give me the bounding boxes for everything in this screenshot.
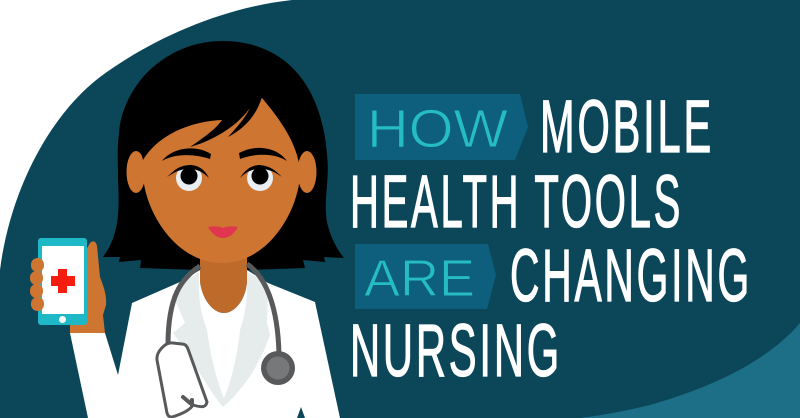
left eyebrow (162, 148, 211, 161)
phone body (38, 238, 87, 325)
red cross (51, 269, 75, 293)
word: NURSING: NURSING (350, 309, 562, 392)
hair fringe strand (135, 80, 262, 160)
collar (173, 272, 270, 407)
hand and phone (30, 238, 106, 333)
word: ARE: ARE (364, 250, 475, 308)
ears (126, 151, 316, 193)
lab coat torso (70, 270, 340, 418)
doctor figure (70, 41, 344, 418)
phone button (59, 316, 66, 323)
coat sleeve notch (297, 407, 305, 418)
lighter corner curve (580, 323, 800, 418)
lips (208, 226, 238, 238)
face (143, 98, 300, 263)
banner: ARE (355, 244, 496, 309)
stethoscope chest piece (261, 351, 295, 385)
fingers (30, 258, 44, 311)
right eyebrow (239, 148, 287, 161)
hair back (103, 41, 344, 270)
banner: HOW (355, 94, 528, 160)
title (350, 85, 752, 392)
left eye (167, 165, 209, 191)
stethoscope tube (168, 264, 279, 355)
neck (200, 250, 247, 313)
right eye (240, 165, 282, 191)
palm and thumb (70, 241, 106, 333)
word: HOW: HOW (367, 99, 508, 159)
stethoscope loop (157, 343, 207, 417)
stethoscope ear tips (183, 397, 192, 405)
phone screen (42, 246, 84, 314)
